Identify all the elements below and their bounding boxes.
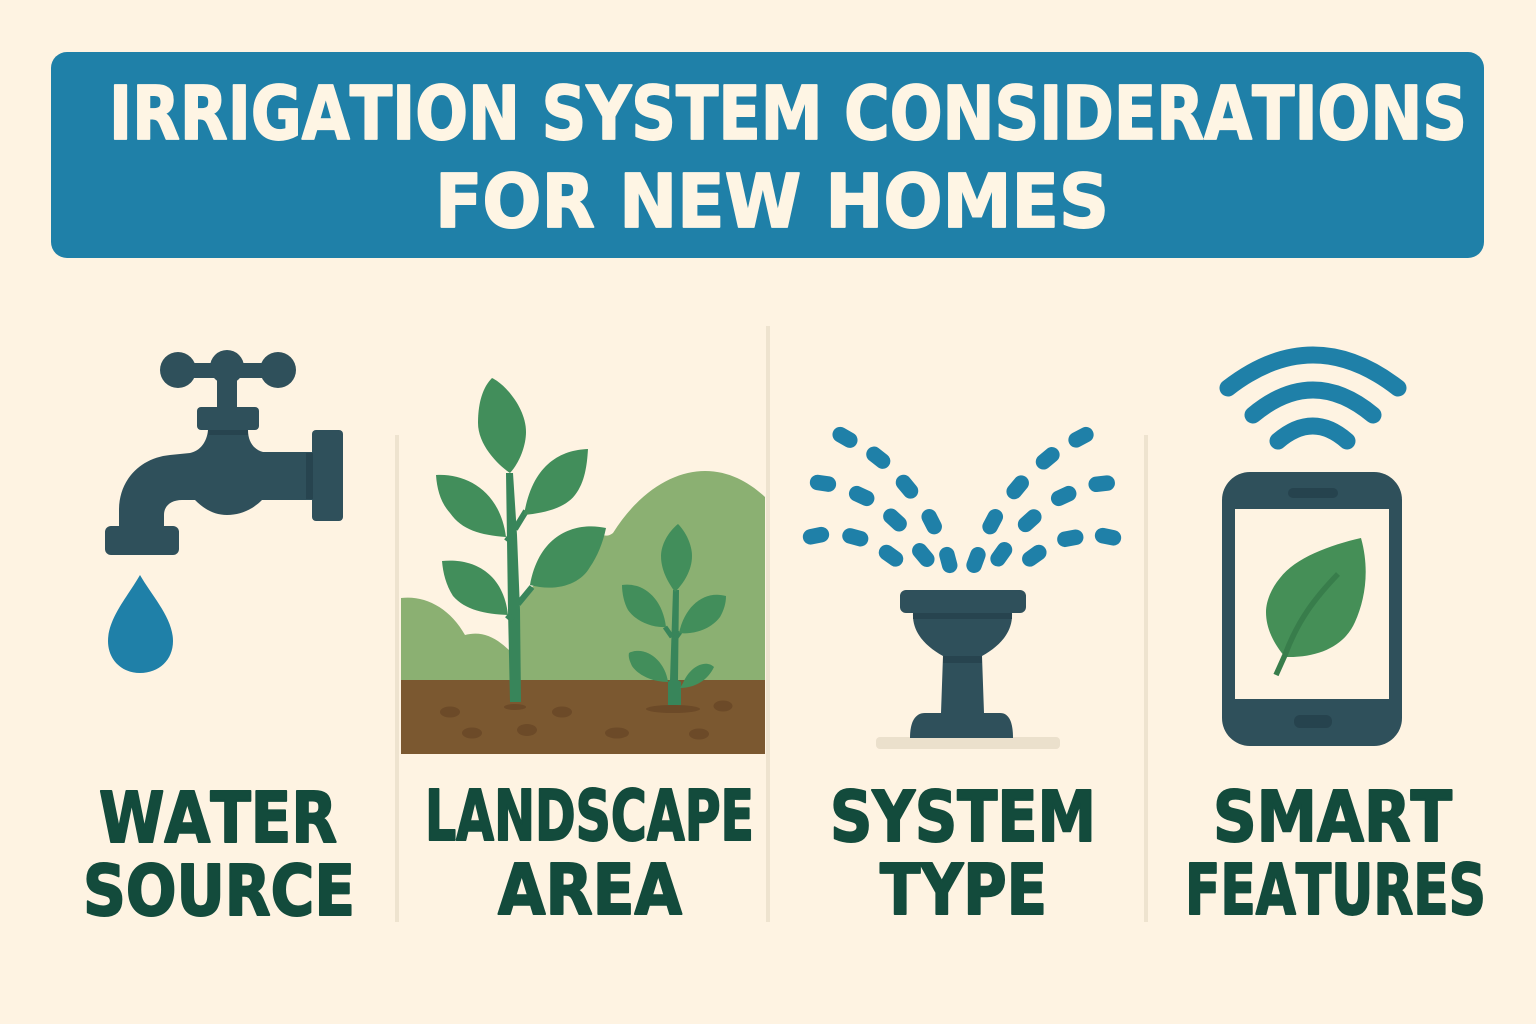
label: system type: TYPE — [880, 849, 1047, 931]
label: landscape area: AREA — [498, 849, 682, 931]
icon: water faucet with drop — [105, 350, 343, 673]
title banner — [51, 52, 1484, 258]
phone — [1222, 472, 1402, 746]
ground shadow — [876, 737, 1060, 749]
large plant — [436, 378, 606, 702]
title text: FOR NEW HOMES — [435, 159, 1109, 245]
water spray — [811, 435, 1113, 565]
sprinkler body — [900, 590, 1026, 738]
label: water source — [83, 777, 355, 932]
label: smart features — [1185, 776, 1486, 931]
wifi arcs — [1228, 355, 1398, 441]
label: system type — [830, 776, 1096, 931]
label: water source: WATER — [99, 777, 337, 859]
leaf — [1266, 538, 1366, 657]
small plant — [622, 524, 726, 705]
soil — [401, 680, 765, 754]
title text — [109, 71, 1467, 245]
icon: smartphone with wifi and leaf — [1222, 355, 1402, 746]
icon: water drop — [108, 575, 173, 673]
icon: sprinkler head with spray — [811, 435, 1113, 749]
label: system type: SYSTEM — [830, 776, 1096, 858]
label: landscape area: LANDSCAPE — [425, 775, 754, 857]
label: smart features: SMART — [1213, 776, 1452, 858]
icon: plants and landscape — [401, 378, 765, 754]
label: landscape area — [425, 775, 754, 931]
hills — [401, 471, 765, 681]
label: water source: SOURCE — [83, 850, 355, 932]
labels — [83, 775, 1486, 932]
